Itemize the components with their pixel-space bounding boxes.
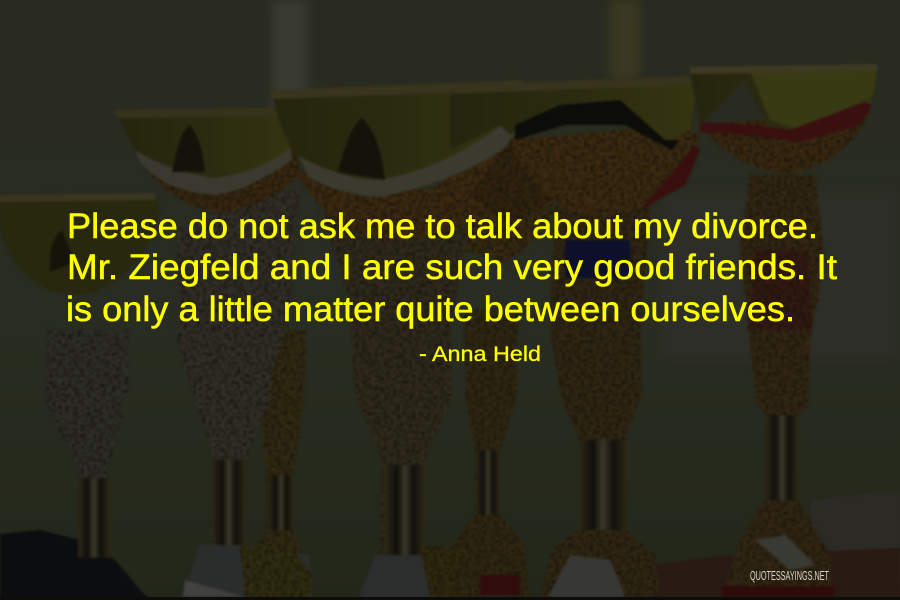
table and cloth: [0, 490, 900, 600]
quote line 3: is only a little matter quite between ourselves.: [66, 290, 795, 329]
watermark: QUOTESSAYINGS.NET: [750, 568, 829, 583]
trophy: far back small left: [245, 330, 312, 597]
trophy 4: centre right: [450, 76, 700, 597]
quote line 1: Please do not ask me to talk about my divorce.: [67, 207, 818, 246]
bottom edge strip: [0, 597, 900, 600]
attribution: - Anna Held: [419, 343, 541, 366]
trophy 5: right: [690, 64, 877, 597]
trophy: far back small centre: [450, 185, 555, 597]
trophy 3: centre: [272, 80, 560, 600]
quote line 2: Mr. Ziegfeld and I are such very good friends. It: [67, 248, 837, 287]
trophy 2: centre left: [115, 107, 312, 597]
trophy 1: left: [0, 193, 160, 558]
quote text: [66, 207, 837, 329]
